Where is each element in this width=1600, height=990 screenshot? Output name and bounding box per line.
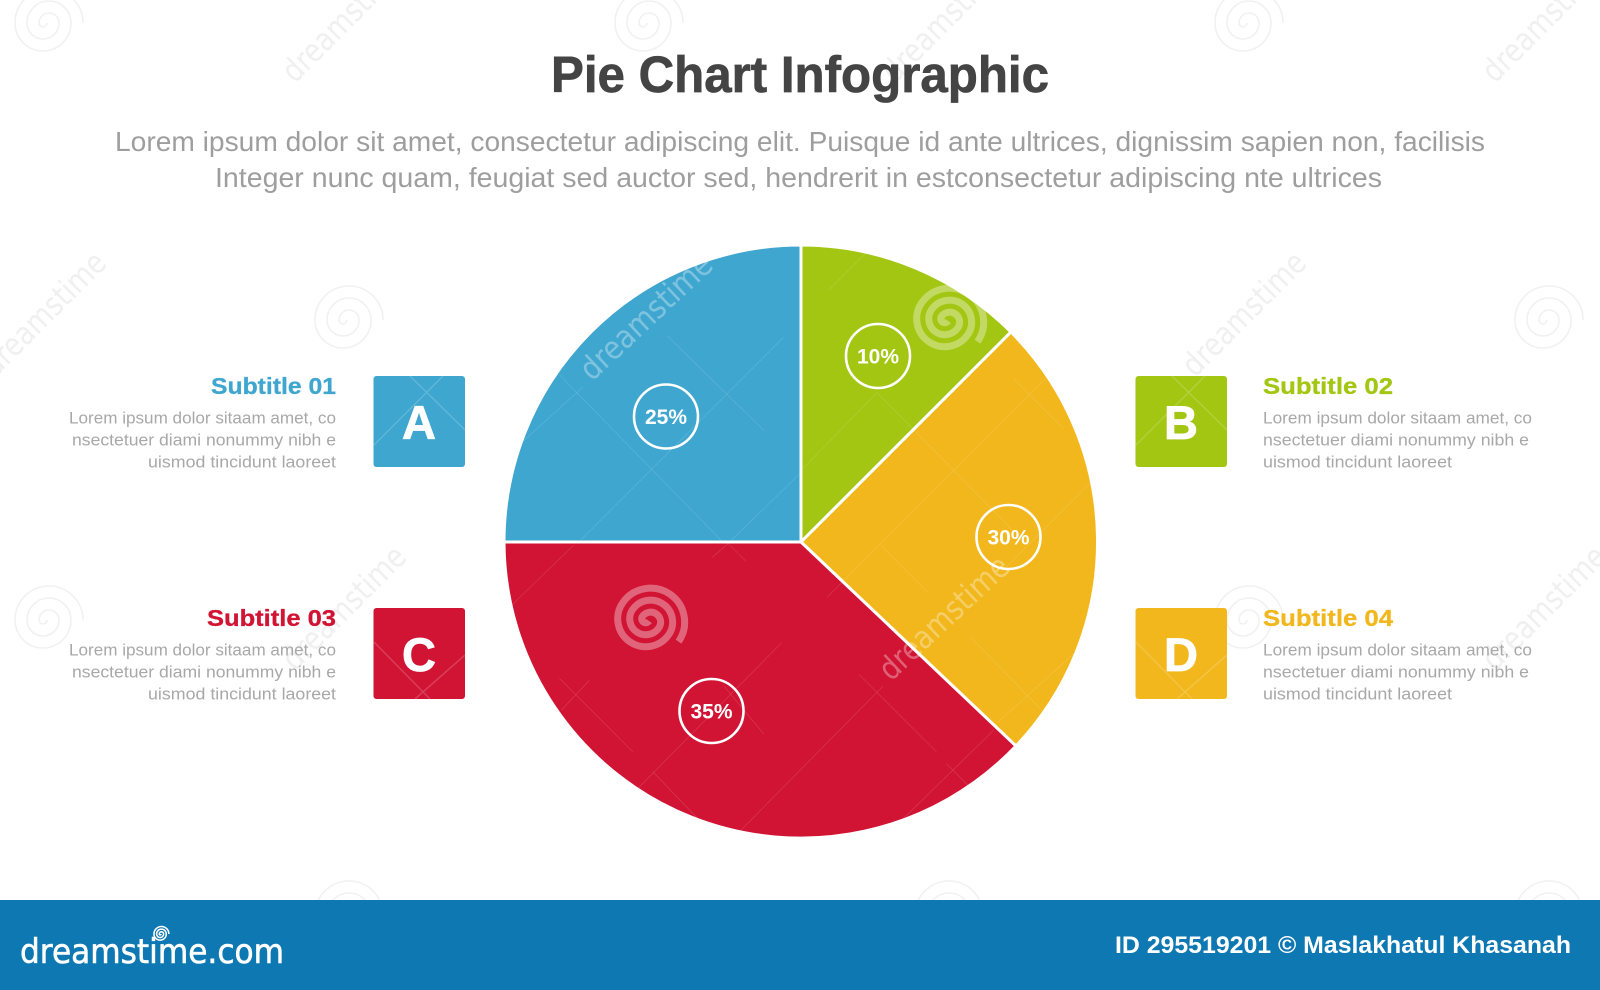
body text: subtitle 03: uismod tincidunt laoreet xyxy=(148,684,336,704)
panel: subtitle 03 xyxy=(69,605,336,704)
icon: badge A: A xyxy=(402,396,436,449)
icon: badge B: B xyxy=(1164,396,1198,449)
label: 35%: 35% xyxy=(690,700,733,724)
label: 10% xyxy=(846,324,910,388)
label: 30% xyxy=(976,505,1040,569)
label: 25%: 25% xyxy=(645,406,687,429)
body text: subtitle 02 xyxy=(1263,408,1532,472)
body text: subtitle 02: uismod tincidunt laoreet xyxy=(1263,452,1452,472)
heading: subtitle 02: Subtitle 02 xyxy=(1263,373,1393,399)
icon: badge B xyxy=(1136,376,1227,467)
body text: subtitle 01: nsectetuer diami nonummy nibh e xyxy=(72,430,336,450)
slice: yellow 30% xyxy=(801,332,1098,746)
background watermarks: dreamstime xyxy=(1174,244,1314,384)
label: 25% xyxy=(634,384,698,448)
description text: Integer nunc quam, feugiat sed auctor sed, hendrerit in estconsectetur adipiscing nte ultrices xyxy=(215,162,1382,193)
pie watermark overlay: dreamstime xyxy=(572,245,720,388)
icon: badge C: C xyxy=(402,628,436,681)
body text: subtitle 03: Lorem ipsum dolor sitaam amet, co xyxy=(69,640,336,660)
panel: subtitle 02 xyxy=(1263,373,1532,472)
body text: subtitle 03: nsectetuer diami nonummy nibh e xyxy=(72,662,336,682)
description text: Lorem ipsum dolor sit amet, consectetur adipiscing elit. Puisque id ante ultrices, dignissim sapien non, facilisis xyxy=(115,126,1485,157)
body text: subtitle 01: uismod tincidunt laoreet xyxy=(148,452,336,472)
icon: badge D xyxy=(1136,608,1227,699)
body text: subtitle 04: uismod tincidunt laoreet xyxy=(1263,684,1452,704)
slice: red 35% xyxy=(504,542,1016,838)
slice: green 10% xyxy=(801,245,1011,542)
icon: badge C xyxy=(374,608,465,699)
body text: subtitle 04 xyxy=(1263,640,1532,704)
heading: subtitle 03: Subtitle 03 xyxy=(207,605,336,631)
body text: subtitle 03 xyxy=(69,640,336,704)
label: 10%: 10% xyxy=(857,346,899,368)
pie chart xyxy=(504,245,1098,838)
title: Pie Chart Infographic xyxy=(551,46,1049,103)
footer bar xyxy=(0,900,1600,990)
heading: subtitle 04: Subtitle 04 xyxy=(1263,605,1393,631)
heading: subtitle 01: Subtitle 01 xyxy=(211,373,336,399)
icon: badge D: D xyxy=(1164,628,1198,681)
body text: subtitle 02: Lorem ipsum dolor sitaam amet, co xyxy=(1263,408,1532,428)
body text: subtitle 02: nsectetuer diami nonummy nibh e xyxy=(1263,430,1529,450)
pie watermark overlay xyxy=(510,245,1089,831)
panel: subtitle 04 xyxy=(1263,605,1532,704)
body text: subtitle 01 xyxy=(69,408,336,472)
panel: subtitle 01 xyxy=(69,373,336,472)
body text: subtitle 04: Lorem ipsum dolor sitaam amet, co xyxy=(1263,640,1532,660)
body text: subtitle 01: Lorem ipsum dolor sitaam amet, co xyxy=(69,408,336,428)
icon: badge A xyxy=(374,376,465,467)
pie watermark overlay: dreamstime xyxy=(871,548,1017,688)
slice: blue 25% xyxy=(504,245,801,542)
description text xyxy=(115,126,1485,193)
background watermarks: dreamstime xyxy=(274,538,414,678)
footer logo: dreamstime.com xyxy=(20,932,284,972)
footer credit: ID 295519201 © Maslakhatul Khasanah xyxy=(1115,932,1571,959)
body text: subtitle 04: nsectetuer diami nonummy nibh e xyxy=(1263,662,1529,682)
label: 30%: 30% xyxy=(987,526,1030,550)
label: 35% xyxy=(680,679,744,743)
